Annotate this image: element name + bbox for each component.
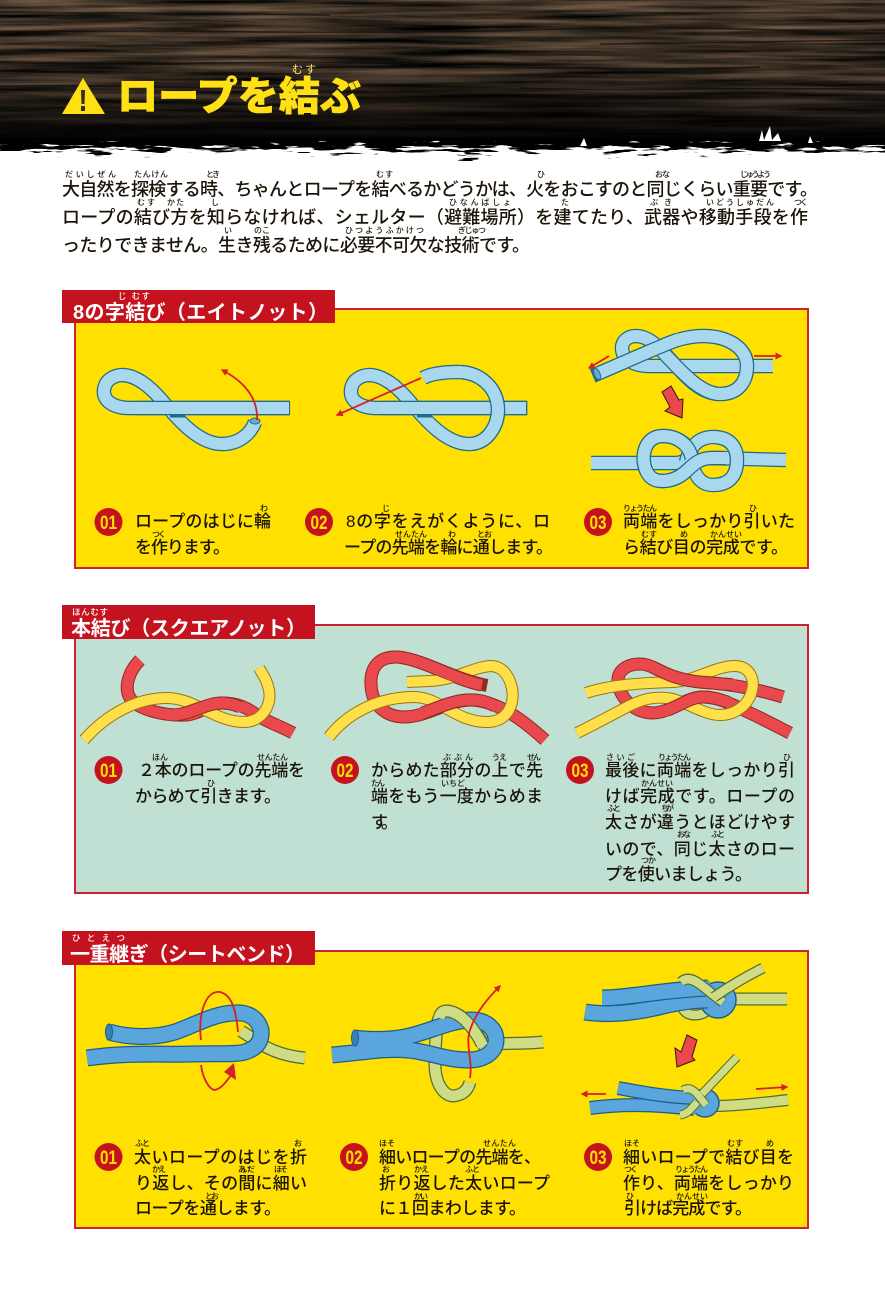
step texts: sheet bend: ふと [135, 1139, 150, 1148]
step texts: figure-eight: ら結び目の完成です。 [623, 538, 788, 557]
step texts: square knot: 太さが違うとほどけやす [605, 812, 795, 832]
step texts: sheet bend: 03 [590, 1148, 606, 1169]
diagram: figure-eight step 3 pulled [589, 336, 781, 394]
step texts: sheet bend: とお [205, 1192, 219, 1201]
intro text block: だいしぜん [65, 170, 116, 179]
step texts: square knot: からめて引きます。 [135, 787, 281, 806]
step texts: sheet bend: りょうたん [675, 1164, 708, 1174]
arrow: red downward [675, 1035, 697, 1067]
step texts: square knot: 端をもう一度からめま [371, 787, 543, 806]
intro text block: のこ [254, 226, 270, 235]
step texts: sheet bend: せんたん [483, 1139, 516, 1148]
step texts: square knot: 01 [100, 761, 117, 782]
step texts: square knot: せんたん [257, 753, 288, 762]
diagram: square knot step 1 [84, 660, 293, 740]
step texts: square knot: たん [371, 779, 385, 788]
step texts: sheet bend: かんせい [676, 1192, 708, 1201]
intro text block: 大自然を探検する時、ちゃんとロープを結べるかどうかは、火をおこすのと同じくらい重要です。 [62, 178, 818, 200]
step texts: square knot: プを使いましょう。 [605, 865, 752, 884]
step texts: figure-eight [94, 503, 795, 557]
step texts: square knot: りょうたん [658, 752, 691, 762]
diagram: figure-eight step 3 finished [591, 436, 786, 485]
step texts: figure-eight: 03 [590, 513, 606, 534]
diagram: figure-eight step 1 [104, 370, 295, 444]
intro text block: ひなんばしょ [449, 197, 511, 207]
intro text block: ったりできません。生き残るために必要不可欠な技術です。 [62, 234, 530, 256]
intro text block: ロープの結び方を知らなければ、シェルター（避難場所）を建てたり、武器や移動手段を作 [62, 208, 808, 228]
step texts: sheet bend: あいだ [238, 1165, 255, 1174]
step texts: sheet bend: お [382, 1165, 390, 1174]
step texts: square knot: うえ [492, 752, 507, 762]
step texts: square knot: けば完成です。ロープの [605, 787, 795, 806]
step texts: square knot: せん [527, 753, 541, 762]
intro text block: むす [376, 170, 393, 179]
step texts: square knot: 03 [572, 761, 588, 782]
step texts: square knot: つか [641, 856, 656, 865]
step texts: sheet bend: お [294, 1139, 302, 1148]
step texts: figure-eight: かんせい [710, 530, 742, 539]
diagram: figure-eight step 2 [337, 372, 532, 444]
step texts: figure-eight: むす [641, 530, 657, 539]
step texts: square knot: 最後に両端をしっかり引 [605, 761, 795, 780]
panel: figure-eight knot [62, 290, 808, 568]
heading: square knot: 本結び（スクエアノット） [71, 617, 306, 640]
step texts: sheet bend: め [766, 1139, 774, 1148]
title: むす [292, 63, 316, 76]
intro text block: かた [167, 198, 184, 207]
step texts: square knot: からめた部分の上で先 [371, 761, 543, 780]
step texts: square knot: ほん [152, 753, 168, 762]
step texts: sheet bend: 作り、両端をしっかり [623, 1174, 794, 1193]
heading: figure-eight knot [62, 290, 335, 324]
step texts: sheet bend: 細いロープの先端を、 [379, 1148, 541, 1167]
step texts: figure-eight: わ [448, 530, 456, 539]
step texts: figure-eight: わ [260, 504, 268, 513]
step texts: figure-eight: りょうたん [623, 503, 657, 513]
intro text block: い [224, 226, 232, 235]
step texts: sheet bend: ほそ [274, 1165, 288, 1174]
step texts: figure-eight: ひ [749, 504, 757, 513]
heading: figure-eight knot: じ むす [118, 291, 150, 301]
diagram: sheet bend step 2 [332, 986, 543, 1096]
step texts: sheet bend: ほそ [379, 1139, 395, 1148]
heading: figure-eight knot: 8の字結び（エイトノット） [73, 301, 328, 324]
step texts: figure-eight: 両端をしっかり引いた [623, 512, 795, 531]
step texts: sheet bend: ロープを通します。 [135, 1199, 281, 1218]
step texts: sheet bend: 引けば完成です。 [624, 1199, 752, 1218]
intro text block: おな [655, 170, 670, 179]
step texts: sheet bend: かえ [414, 1165, 429, 1174]
step texts: square knot: いので、同じ太さのロー [605, 840, 795, 859]
intro text block: ひつようふかけつ [345, 225, 424, 235]
step texts: sheet bend: ほそ [624, 1139, 640, 1148]
heading: square knot [62, 605, 315, 640]
step texts: figure-eight: 02 [310, 513, 328, 534]
step texts: sheet bend [94, 1139, 794, 1218]
step texts: square knot: ふと [711, 830, 725, 839]
step texts: figure-eight: ロープのはじに輪 [135, 512, 271, 531]
intro text block: ひ [537, 170, 545, 179]
step texts: sheet bend: つく [624, 1165, 638, 1174]
step texts: sheet bend: むす [727, 1139, 743, 1148]
step texts: square knot: ちが [661, 803, 674, 813]
intro text block: し [211, 198, 219, 207]
step texts: square knot: かんせい [641, 779, 673, 788]
step texts: figure-eight: せんたん [395, 530, 427, 539]
arrow: red downward [662, 386, 683, 418]
step texts: sheet bend: ふと [465, 1165, 480, 1174]
heading: square knot: ほんむす [72, 607, 108, 617]
heading: sheet bend [62, 931, 315, 966]
step texts: square knot: 02 [336, 761, 354, 782]
step texts: square knot: ひ [207, 779, 215, 788]
heading: sheet bend: 一重継ぎ（シートベンド） [70, 942, 305, 966]
diagram: sheet bend step 3 pulled [582, 1057, 788, 1117]
diagram: square knot step 2 [329, 657, 545, 740]
step texts: square knot: ひ [783, 753, 791, 762]
step texts: sheet bend: り返し、その間に細い [135, 1174, 307, 1193]
step texts: sheet bend: に１回まわします。 [379, 1199, 526, 1218]
step texts: figure-eight: とお [477, 530, 492, 539]
step texts: figure-eight: じ [382, 504, 390, 513]
intro text block: むす [137, 198, 155, 207]
diagram: sheet bend step 3 tied [585, 968, 787, 1018]
step texts: sheet bend: 01 [100, 1148, 117, 1169]
intro text block: とき [206, 170, 220, 179]
step texts: sheet bend: 折り返した太いロープ [379, 1174, 550, 1193]
step texts: figure-eight: 01 [100, 513, 117, 534]
step texts: figure-eight: を作ります。 [135, 538, 230, 557]
step texts: sheet bend: かい [414, 1192, 428, 1201]
intro text block: た [561, 198, 569, 207]
step texts: sheet bend: かえ [152, 1165, 166, 1174]
step texts: figure-eight: ープの先端を輪に通します。 [344, 538, 553, 557]
title: ロープを結ぶ [117, 75, 361, 119]
step texts: sheet bend: 02 [346, 1148, 362, 1169]
step texts: figure-eight: つく [152, 530, 166, 539]
intro text block: いどうしゅだん [706, 197, 774, 207]
diagram: sheet bend step 1 [87, 992, 305, 1090]
intro text block [62, 169, 818, 256]
step texts: square knot: いちど [441, 778, 465, 788]
step texts: square knot: ２本のロープの先端を [138, 761, 305, 780]
step texts: sheet bend: ひ [626, 1192, 634, 1201]
header: dark wood background with torn edge [0, 0, 885, 168]
step texts: figure-eight: 8の字をえがくように、ロ [346, 511, 550, 531]
step texts: sheet bend: 細いロープで結び目を [623, 1148, 794, 1167]
step texts: square knot: さいご [606, 752, 635, 762]
heading: sheet bend: ひとえつ [72, 933, 125, 943]
step texts: sheet bend: 太いロープのはじを折 [134, 1148, 307, 1167]
panel: sheet bend [62, 931, 808, 1228]
step texts: square knot: す。 [371, 813, 398, 832]
step texts: square knot: おな [677, 830, 691, 839]
intro text block: じゅうよう [740, 169, 771, 179]
diagram: square knot step 3 [577, 664, 790, 733]
intro text block: つく [794, 198, 808, 207]
step texts: square knot [94, 752, 795, 884]
panel: square knot [62, 605, 808, 893]
step texts: square knot: ふと [607, 804, 621, 813]
intro text block: ぶき [650, 198, 672, 207]
icon: warning triangle [62, 78, 105, 114]
intro text block: たんけん [134, 170, 168, 179]
intro text block: ぎじゅつ [458, 225, 486, 235]
step texts: square knot: ぶぶん [443, 753, 473, 762]
step texts: figure-eight: め [680, 530, 688, 539]
